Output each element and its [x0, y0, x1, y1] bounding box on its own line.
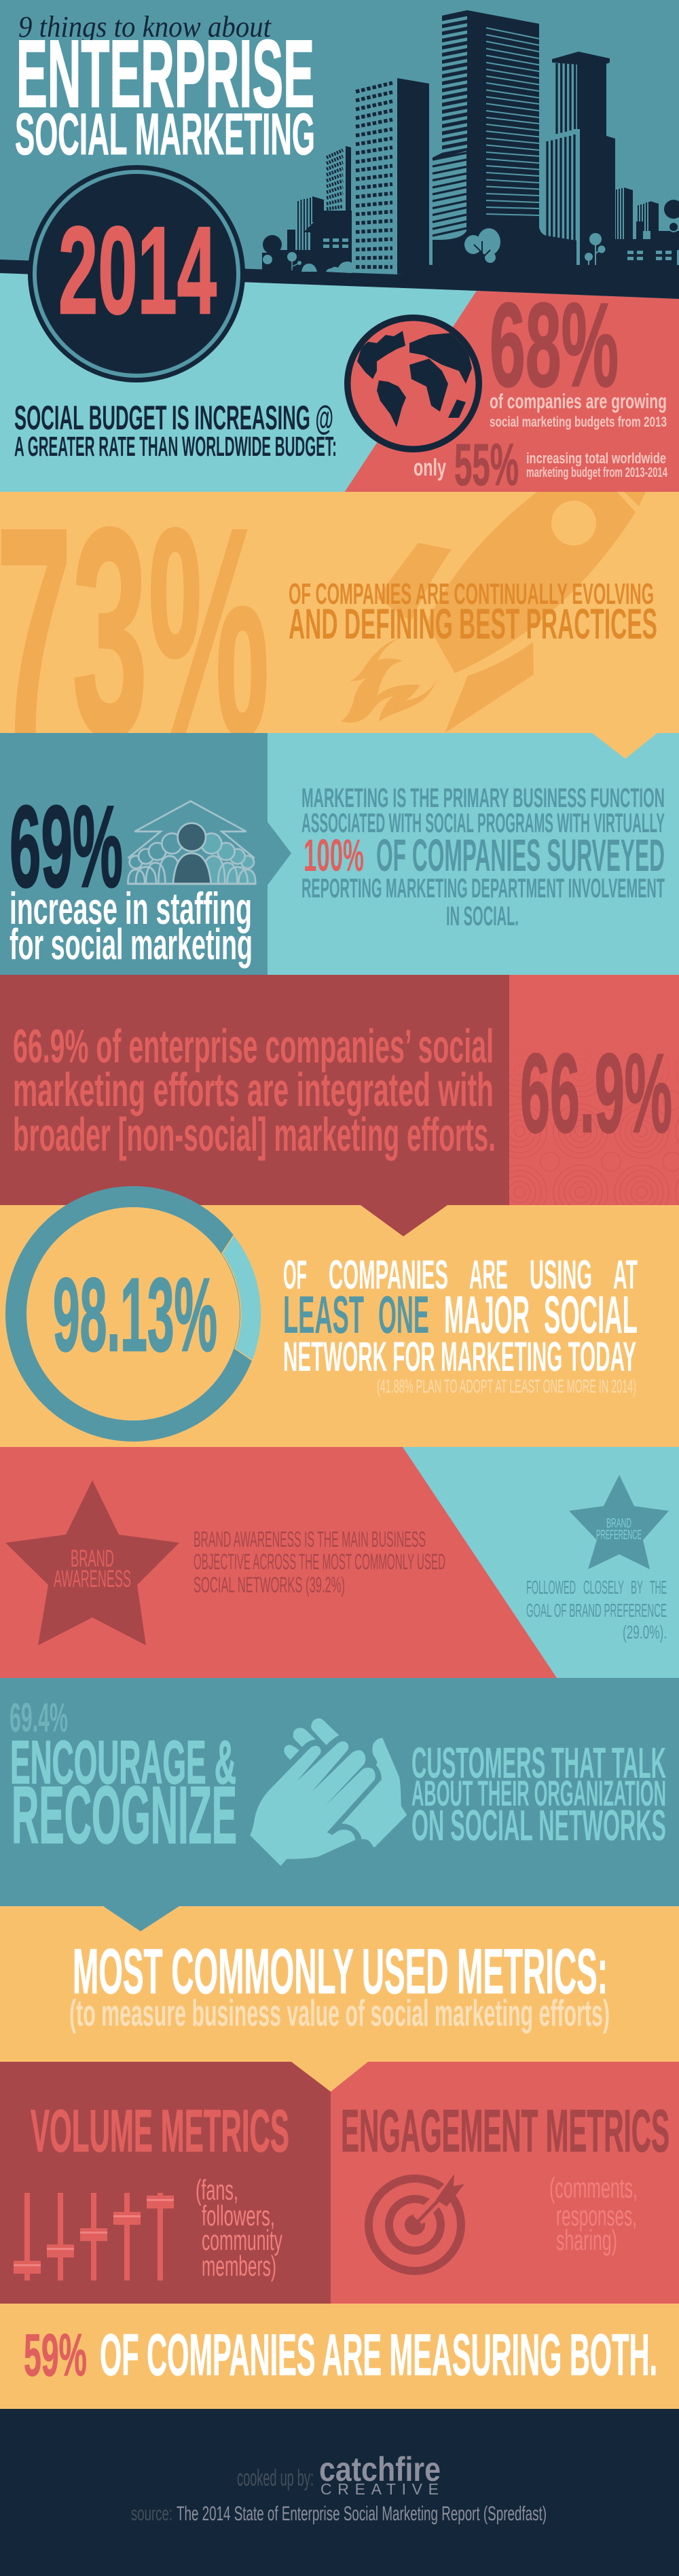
- brand awareness text: [194, 1527, 445, 1597]
- text: ENTERPRISE: [16, 20, 314, 127]
- marketing function text: 100%: [304, 830, 364, 881]
- panel: budget background: [0, 272, 679, 493]
- integration text: [13, 1020, 496, 1161]
- panel: marketing function: [268, 733, 679, 975]
- building: windows tower: [356, 78, 429, 274]
- brand preference text: [526, 1577, 667, 1643]
- building: right tower: [538, 52, 615, 268]
- panel: encourage and recognize: [0, 1678, 679, 1906]
- brand awareness text: SOCIAL NETWORKS (39.2%): [194, 1573, 345, 1597]
- title kicker: 9 things to know about: [18, 10, 272, 43]
- building: striped house block: [268, 196, 352, 272]
- panel: best practices: [0, 492, 679, 733]
- stat: only 55 percent: only: [414, 454, 446, 481]
- panel: encourage and recognize: ENCOURAGE &: [10, 1729, 236, 1797]
- panel: measuring both: [0, 2304, 679, 2409]
- encourage heading: [10, 1729, 237, 1861]
- arrow: right pointer: [268, 822, 291, 885]
- panel: staffing: [0, 733, 291, 975]
- donut chart: 98.13 percent: [16, 1197, 261, 1431]
- network text: USING: [530, 1252, 592, 1298]
- building: far right blocks: [615, 187, 679, 266]
- donut chart: 98.13 percent: 98.13%: [53, 1257, 217, 1373]
- network text: MAJOR: [444, 1285, 530, 1344]
- network text: ARE: [469, 1252, 508, 1298]
- icon: brand awareness star: AWARENESS: [54, 1566, 131, 1592]
- volume list: followers,: [202, 2200, 275, 2232]
- volume list: (fans,: [196, 2174, 238, 2206]
- panel: engagement metrics: [291, 2062, 679, 2304]
- credit: cooked up by:: [237, 2465, 314, 2491]
- icon: brand awareness star: [5, 1480, 179, 1645]
- windows of house: [322, 236, 349, 249]
- icon: target with arrow: [369, 2174, 464, 2271]
- year badge: [28, 165, 245, 382]
- network text: [283, 1252, 638, 1397]
- icon: brand awareness star: BRAND: [71, 1545, 114, 1572]
- customers text: [411, 1738, 666, 1850]
- volume list: members): [202, 2250, 276, 2282]
- building: small windows tower: [327, 146, 351, 212]
- volume list: [196, 2174, 282, 2282]
- panel: integration: [0, 975, 679, 1205]
- stat: only 55 percent: [414, 432, 668, 498]
- icon: clapping hands: [250, 1718, 407, 1866]
- logo: catchfire creative: catchfire: [319, 2450, 441, 2488]
- panel: metrics heading: [0, 1906, 679, 2062]
- network text: OF: [283, 1252, 307, 1298]
- staffing text: increase in staffing: [10, 883, 252, 933]
- arrow: orange pointer: [291, 2062, 368, 2092]
- stat: only 55 percent: 55%: [454, 432, 519, 498]
- best practices text: [289, 577, 657, 648]
- engagement list: sharing): [556, 2224, 617, 2256]
- brand preference text: CLOSELY: [583, 1577, 624, 1598]
- source: [131, 2503, 547, 2525]
- logo: catchfire creative: CREATIVE: [320, 2480, 439, 2498]
- title: [15, 10, 315, 167]
- panel: header skyline: [0, 0, 679, 493]
- icon: brand preference star: [569, 1475, 669, 1569]
- panel: footer: [0, 2409, 679, 2576]
- network text: LEAST: [283, 1285, 364, 1344]
- panel: volume metrics: VOLUME METRICS: [31, 2097, 289, 2164]
- windows: [627, 249, 646, 262]
- panel: volume metrics: [0, 2062, 331, 2304]
- year number: 2014: [58, 200, 217, 340]
- budget heading: SOCIAL BUDGET IS INCREASING @: [14, 399, 333, 437]
- icon: city skyline: [262, 10, 679, 274]
- panel: staffing: 69%: [10, 782, 123, 912]
- icon: people with arrow: [128, 801, 256, 884]
- panel: social network use: [0, 1197, 679, 1447]
- staffing text: [10, 883, 253, 969]
- title line 2: SOCIAL MARKETING: [15, 102, 315, 167]
- building: main tower: [433, 10, 539, 268]
- ground band: [0, 260, 679, 299]
- icon: brand preference star: BRAND: [606, 1516, 631, 1531]
- source: source:: [131, 2503, 172, 2525]
- arrow: orange pointer: [592, 733, 657, 759]
- marketing function text: IN SOCIAL.: [446, 901, 519, 931]
- panel: budget red wedge: [344, 291, 679, 493]
- icon: trees: [262, 228, 606, 273]
- budget heading: [14, 399, 337, 462]
- panel: social network use: AT: [613, 1252, 638, 1298]
- network text: COMPANIES: [329, 1252, 448, 1298]
- marketing function text: [301, 783, 665, 931]
- panel: encourage and recognize: RECOGNIZE: [12, 1770, 237, 1861]
- volume list: community: [202, 2224, 282, 2256]
- icon: globe: [344, 315, 482, 452]
- network text: ONE: [378, 1285, 429, 1344]
- panel: best practices: 73%: [0, 467, 270, 798]
- engagement list: [549, 2172, 638, 2256]
- budget heading: A GREATER RATE THAN WORLDWIDE BUDGET:: [14, 431, 337, 462]
- arrow: teal pointer: [103, 1906, 179, 1931]
- staffing text: for social marketing: [10, 920, 253, 969]
- panel: measuring both: 59%: [24, 2321, 87, 2389]
- brand preference text: FOLLOWED: [526, 1577, 576, 1598]
- icon: sliders: [14, 2193, 174, 2280]
- arrow: dark red pointer: [361, 1205, 447, 1236]
- panel: brand objectives: [0, 1447, 679, 1678]
- icon: rocket: [341, 492, 646, 733]
- brand preference text: BY: [631, 1577, 643, 1598]
- stat: 69.4 percent: 69.4%: [10, 1695, 68, 1740]
- brand awareness text: BRAND AWARENESS IS THE MAIN BUSINESS: [194, 1527, 426, 1552]
